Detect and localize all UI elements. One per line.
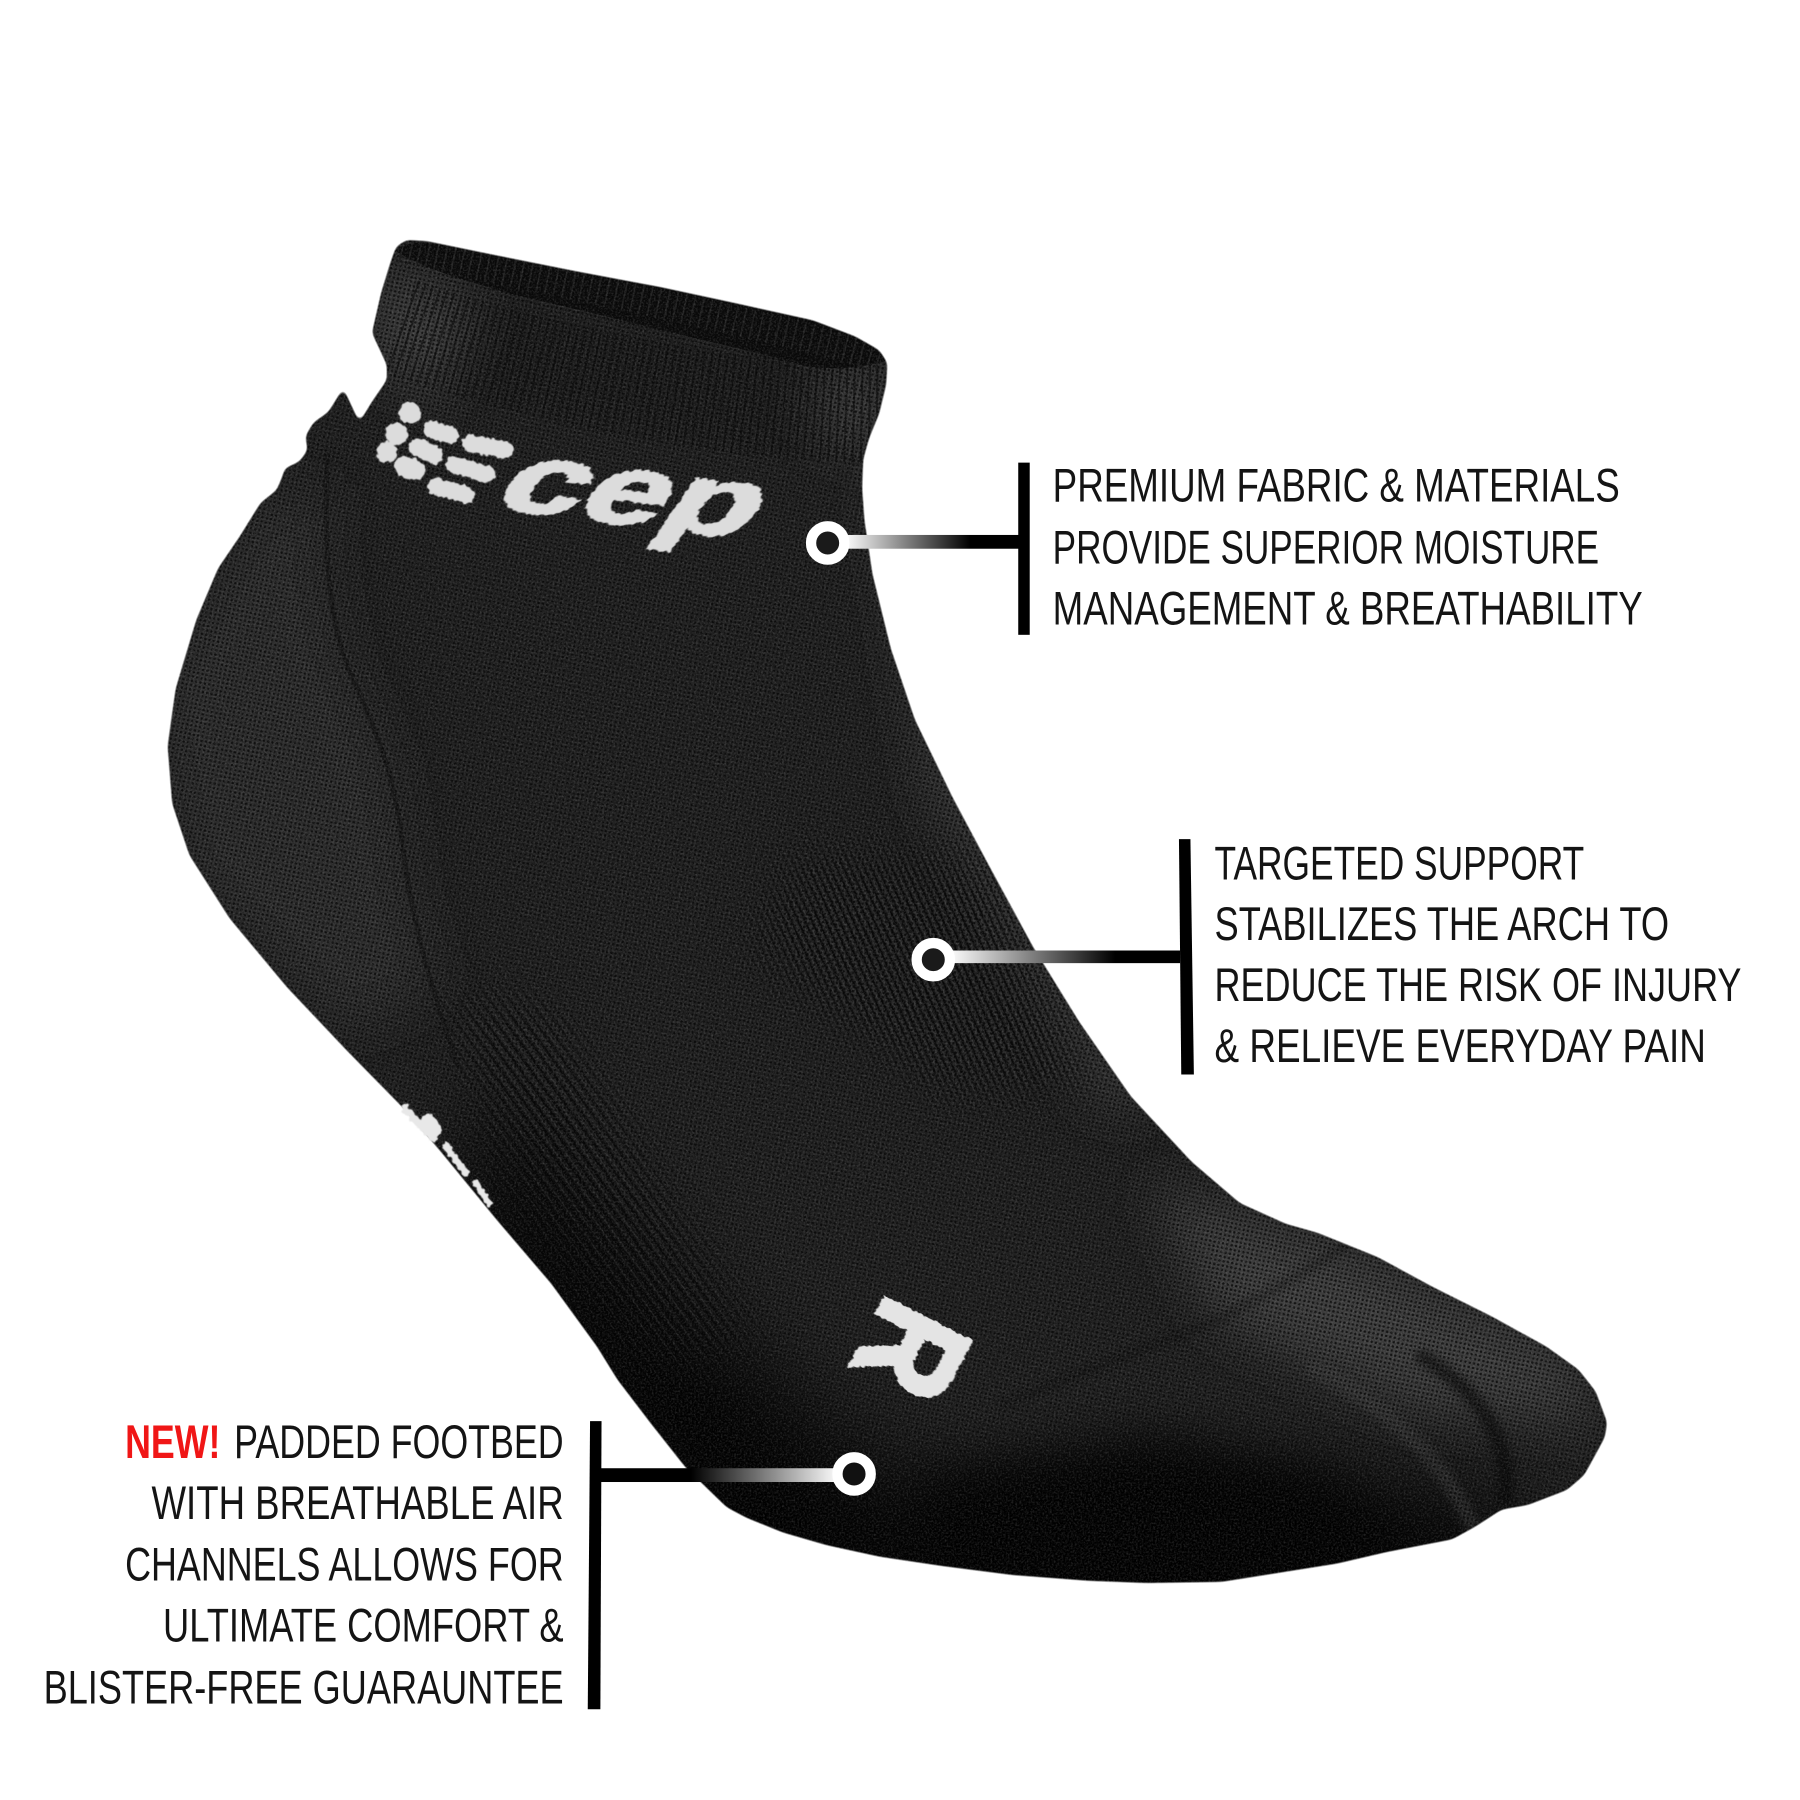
heel seam bbox=[326, 453, 459, 1068]
callout text: PADDED FOOTBED bbox=[234, 1415, 564, 1468]
vertical bar bbox=[588, 1421, 602, 1709]
callout text: PROVIDE SUPERIOR MOISTURE bbox=[1053, 521, 1599, 574]
callout text: CHANNELS ALLOWS FOR bbox=[125, 1538, 564, 1591]
arch ribbing bbox=[750, 834, 1092, 1108]
connector line bbox=[844, 535, 1019, 549]
toe seam bbox=[1224, 1247, 1342, 1318]
connector line bbox=[599, 1468, 840, 1482]
sock body with shading bbox=[149, 230, 1630, 1630]
callout text: TARGETED SUPPORT bbox=[1215, 836, 1584, 889]
callout: padded footbed bbox=[44, 1415, 871, 1714]
callout text bbox=[44, 1415, 564, 1714]
toe underside bbox=[944, 1425, 1358, 1528]
toe ridges bbox=[1309, 1366, 1475, 1533]
new badge text: NEW! bbox=[125, 1415, 220, 1468]
callout text: WITH BREATHABLE AIR bbox=[152, 1476, 564, 1529]
heel panel shading bbox=[168, 503, 424, 1016]
product photo: black low-cut compression sock bbox=[149, 230, 1630, 1630]
callout text: PREMIUM FABRIC & MATERIALS bbox=[1053, 459, 1620, 512]
callout text: ULTIMATE COMFORT & bbox=[163, 1599, 564, 1652]
cuff ribbing bbox=[402, 327, 878, 413]
callout text bbox=[1215, 836, 1741, 1072]
ankle highlight bbox=[908, 701, 1134, 1106]
marker ring bbox=[837, 1457, 871, 1491]
callout text: BLISTER-FREE GUARAUNTEE bbox=[44, 1661, 564, 1714]
callout text bbox=[1053, 459, 1643, 634]
marker ring bbox=[917, 943, 950, 976]
right-foot letter mark: R bbox=[823, 1278, 999, 1423]
callout: targeted support bbox=[917, 836, 1741, 1074]
toe box highlight bbox=[1148, 1182, 1607, 1423]
logo wordmark: cep: cep bbox=[475, 422, 802, 558]
cuff interior opening bbox=[395, 243, 886, 368]
knit pattern and texture bbox=[149, 230, 1630, 1607]
callout text: MANAGEMENT & BREATHABILITY bbox=[1053, 581, 1643, 634]
callout text: STABILIZES THE ARCH TO bbox=[1215, 897, 1669, 950]
logo mark: bars and dots on cuff bbox=[377, 402, 505, 495]
cuff front band bbox=[373, 250, 890, 455]
connector line bbox=[948, 951, 1180, 963]
vertical bar bbox=[1018, 463, 1030, 635]
marker ring bbox=[811, 526, 844, 560]
sole logo fragments bbox=[405, 1109, 489, 1203]
vertical bar bbox=[1179, 839, 1194, 1074]
callout: premium fabric bbox=[811, 459, 1643, 635]
sole dark band bbox=[450, 1116, 1518, 1564]
sole ribbing bbox=[454, 990, 731, 1368]
